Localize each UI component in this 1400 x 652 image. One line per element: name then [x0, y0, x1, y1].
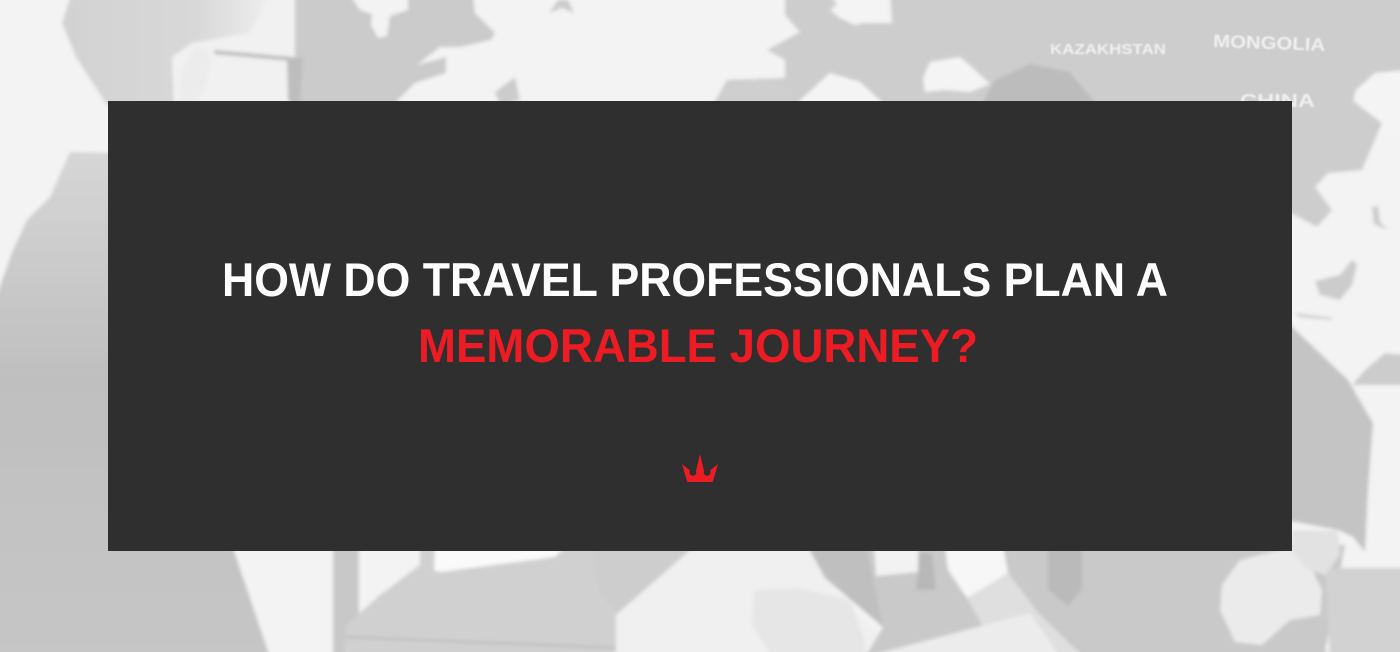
face [172, 0, 295, 105]
world map: Asia south [1285, 100, 1382, 227]
man's sleeve on right [1285, 320, 1373, 552]
title line two: MEMORABLE JOURNEY? [418, 319, 978, 372]
world map: Americas [295, 0, 495, 105]
man's right hand [1220, 545, 1322, 645]
seated people heads [715, 78, 800, 105]
world map: north-east coast [1352, 70, 1400, 135]
woman's ear [178, 47, 211, 105]
pillow [434, 545, 567, 572]
blurred map labels [1050, 31, 1325, 111]
laptop [865, 613, 1060, 652]
blurred map labels: CHINA [1240, 91, 1315, 111]
world map: Mediterranean and Black Sea [795, 57, 990, 105]
title line one: HOW DO TRAVEL PROFESSIONALS PLAN A [222, 253, 1168, 306]
sofa [344, 545, 625, 652]
blurred map labels: KAZAKHSTAN [1050, 41, 1166, 58]
man's suit and trousers [807, 545, 1345, 652]
clasp [916, 553, 936, 590]
world map: northern sea [830, 0, 892, 25]
dark central panel [108, 101, 1292, 551]
icon: crown [682, 454, 718, 482]
shirt between arms [874, 545, 918, 576]
world map: Borneo, Philippines, Java, Australia [1295, 206, 1400, 385]
carpet on right [1325, 568, 1400, 652]
watch [1292, 530, 1340, 575]
seated woman's skirt and legs [616, 545, 883, 652]
left jacket [0, 152, 270, 652]
cuff [945, 545, 1008, 598]
tie [1048, 545, 1082, 606]
bottom chair post [333, 545, 359, 652]
world map: islands [495, 0, 574, 105]
blurred map labels: MONGOLIA [1213, 31, 1325, 55]
title [222, 253, 1168, 372]
woman's hair [62, 0, 268, 105]
world map: Eurasia [713, 0, 1400, 105]
glasses [214, 50, 303, 105]
left jacket of seated woman [594, 545, 696, 615]
hand [967, 573, 1084, 652]
